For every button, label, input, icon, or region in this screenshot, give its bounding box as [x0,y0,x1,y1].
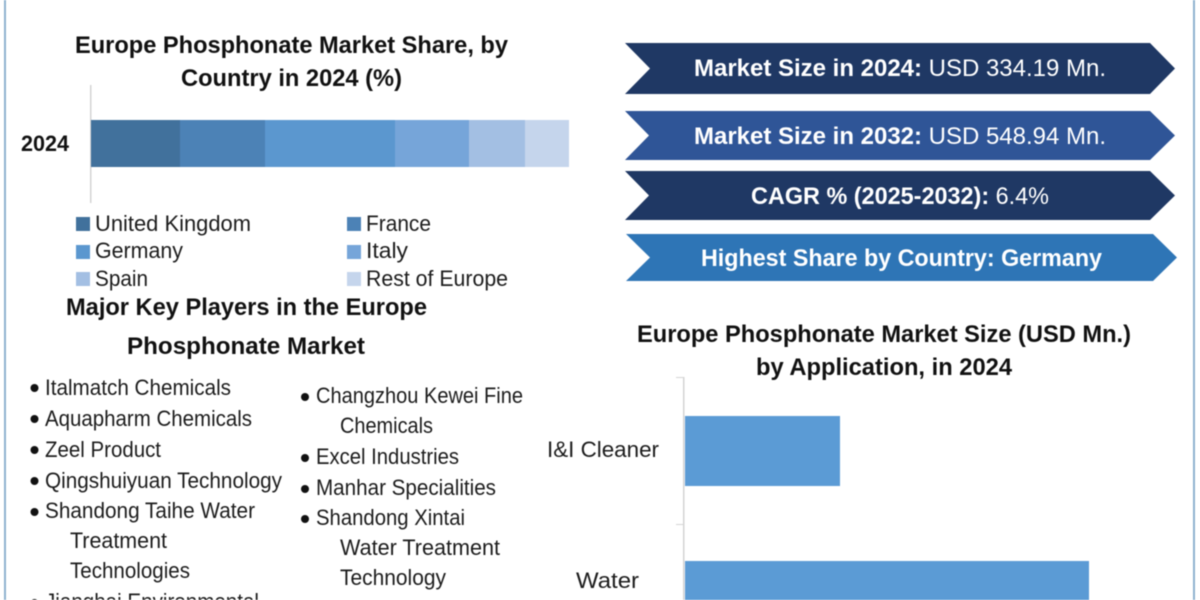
list: players column 1: Zeel Product [45,437,161,462]
list: players column 1: Shandong Taihe Water [45,498,255,523]
heading: application chart title [637,321,1131,381]
stacked bar chart: 2024 share [21,85,569,203]
panel: key statistics chevrons [625,43,1177,281]
list: players column 1: Qingshuiyuan Technology [45,468,282,493]
list: players column 2: Manhar Specialities [316,475,496,500]
list: players column 1: Italmatch Chemicals [45,375,231,400]
heading: application chart title: Europe Phosphonate Market Size (USD Mn.) [637,321,1131,348]
list: players column 1: Technologies [70,558,190,583]
list: players column 2: Water Treatment [340,535,500,560]
heading: market share chart title: Country in 2024 (%) [181,65,402,92]
bar chart: application: I&I Cleaner [547,437,659,462]
legend: countries: Italy [366,238,408,263]
heading: market share chart title: Europe Phosphonate Market Share, by [75,32,509,59]
list: players column 2 [301,383,523,590]
chevron: market size 2032 [625,111,1175,160]
list: players column 1: Aquapharm Chemicals [45,406,252,431]
legend: countries: Germany [95,238,183,263]
bar chart: application [547,377,1089,600]
panel: market size by application [547,321,1131,600]
bar chart: application: Water [576,568,639,593]
heading: key players title: Major Key Players in the Europe [66,294,427,321]
list: players column 2: Technology [340,565,446,590]
legend: countries: Rest of Europe [366,266,508,291]
list: players column 2: Excel Industries [316,444,459,469]
legend: countries [76,211,508,291]
list: players column 2: Chemicals [340,413,433,438]
legend: countries: France [366,211,431,236]
heading: market share chart title [75,32,509,92]
panel: market share by country [21,32,569,291]
heading: application chart title: by Application, in 2024 [756,354,1013,381]
panel: major key players [30,294,523,600]
chevron: market size 2032: Market Size in 2032: USD 548.94 Mn. [694,123,1106,150]
chevron: CAGR: CAGR % (2025-2032): 6.4% [751,183,1049,210]
legend: countries: Spain [95,266,148,291]
heading: key players title [66,294,427,360]
list: players column 2: Shandong Xintai [316,505,465,530]
list: players column 1: Treatment [70,528,167,553]
list: players column 2: Changzhou Kewei Fine [316,383,523,408]
chevron: highest share: Highest Share by Country: Germany [701,245,1103,272]
heading: key players title: Phosphonate Market [127,333,365,360]
chevron: market size 2024: Market Size in 2024: USD 334.19 Mn. [694,55,1106,82]
legend: countries: United Kingdom [95,211,251,236]
chevron: CAGR [625,171,1175,220]
chevron: market size 2024 [625,43,1175,94]
stacked bar chart: 2024 share: 2024 [21,131,70,156]
list: players column 1 [30,375,282,600]
chevron: highest share [626,234,1177,281]
